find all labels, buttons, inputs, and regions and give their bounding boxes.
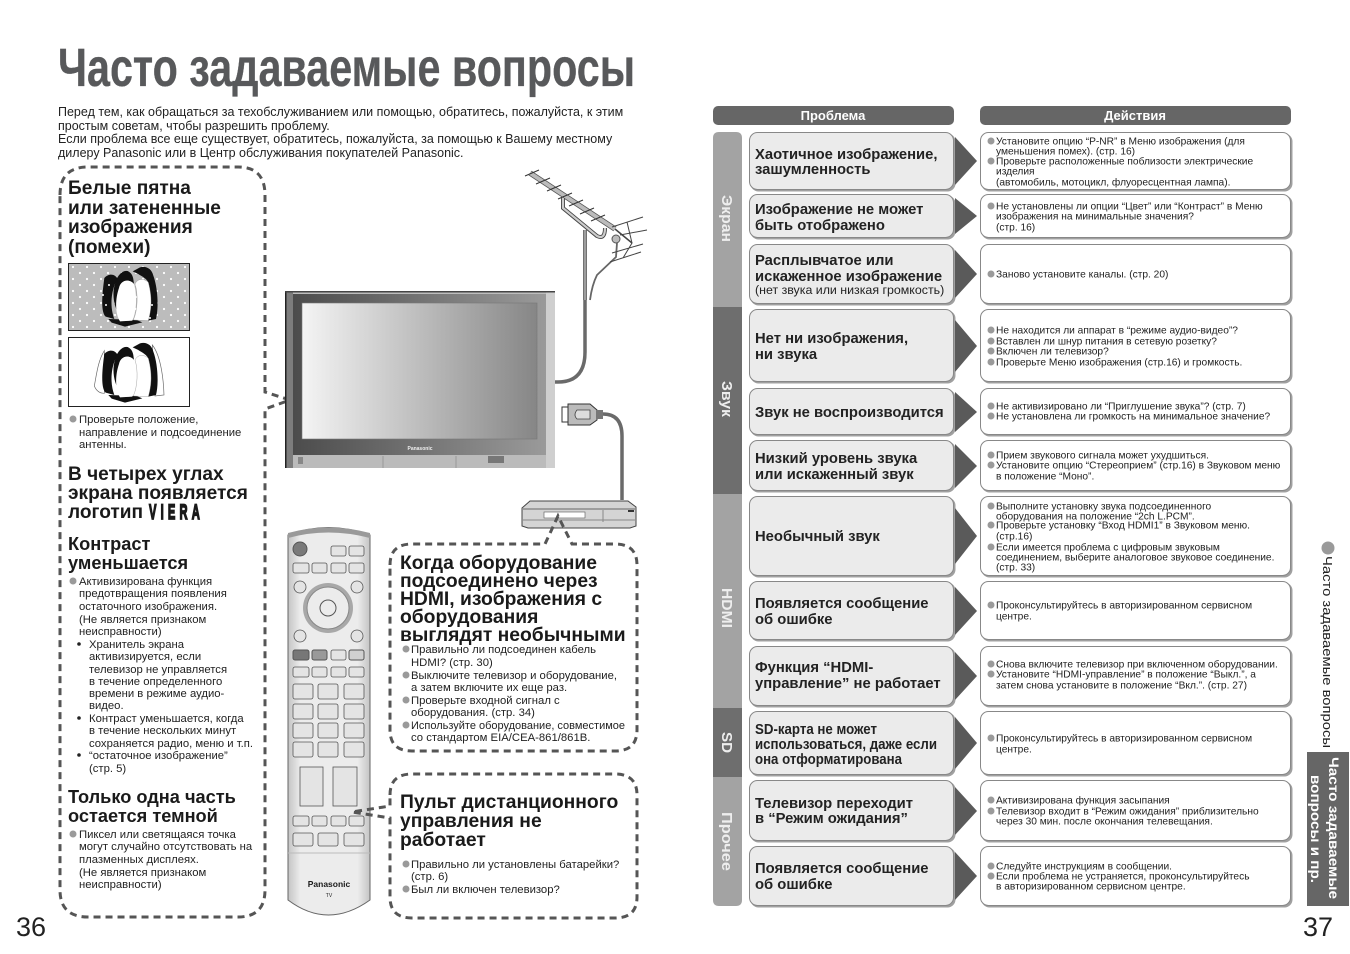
row 10: использоваться, даже если [755, 737, 937, 753]
row 5: Звук не воспроизводится [755, 405, 944, 421]
tip: contrast [70, 576, 253, 775]
tips: HDMI: Выключите телевизор и оборудование, [411, 670, 617, 682]
heading: corners logo: экрана появляется [68, 483, 248, 504]
title: Часто задаваемые вопросы [58, 38, 635, 98]
row 4 [750, 310, 1292, 384]
heading: white spots: (помехи) [68, 237, 151, 258]
row 6: или искаженный звук [755, 467, 914, 483]
page number 37: 37 [1303, 912, 1333, 942]
tip: dark part: неисправности) [79, 879, 162, 891]
illustration: remote control: TV [326, 893, 333, 899]
tip: contrast: телевизор не управляется [89, 664, 227, 676]
row 8: Появляется сообщение [755, 596, 929, 612]
row 12 [750, 846, 1292, 908]
heading: corners logo: логотип [68, 502, 143, 523]
tip: contrast: видео. [89, 700, 124, 712]
tab: screen [713, 132, 742, 307]
row 7: Проверьте установку “Вход HDMI1” в Звуковом меню. [996, 520, 1250, 532]
tip: contrast: (Не является признаком [79, 614, 206, 626]
row 2: Не установлены ли опции “Цвет” или “Контраст” в Меню [996, 202, 1263, 212]
tip: contrast: активизируется, если [89, 651, 201, 663]
image: clean penguins [68, 338, 190, 406]
illustration: remote control: Panasonic [308, 879, 351, 889]
tip: contrast: (стр. 5) [89, 763, 126, 775]
row 5 [750, 388, 1292, 436]
side tab [1307, 752, 1349, 906]
tip: antenna: Проверьте положение, [79, 414, 198, 426]
intro text: простым советам, чтобы разрешить проблему. [58, 119, 330, 133]
side tab: вопросы и пр. [1308, 775, 1324, 883]
tip: contrast: предотвращения появления [79, 588, 227, 600]
row 1: уменьшения помех). (стр. 16) [996, 146, 1135, 158]
row 11: в “Режим ожидания” [755, 811, 908, 827]
row 11: Активизирована функция засыпания [996, 794, 1170, 806]
tips: HDMI: а затем включите их еще раз. [411, 682, 567, 694]
tip: contrast: неисправности) [79, 626, 162, 638]
intro text: Если проблема все еще существует, обратитесь, пожалуйста, за помощью к Вашему местному [58, 132, 613, 146]
row 10 [750, 712, 1292, 776]
row 1 [750, 132, 1292, 192]
image: noisy penguins [68, 264, 190, 330]
row 3: Заново установите каналы. (стр. 20) [996, 270, 1168, 280]
category tabs [713, 132, 742, 906]
row 9: затем снова установите в положение “Вкл.”. (стр. 27) [996, 680, 1247, 692]
row 12: в авторизированном сервисном центре. [996, 882, 1186, 892]
intro text: дилеру Panasonic или в Центр обслуживания покупателей Panasonic. [58, 146, 464, 160]
panel: remote tips [352, 774, 637, 918]
heading: HDMI: оборудования [400, 607, 538, 628]
row 6: Установите опцию “Стереоприем” (стр.16) в Звуковом меню [996, 460, 1281, 472]
row 1: Установите опцию “P-NR” в Меню изображения (для [996, 136, 1245, 148]
heading: HDMI: выглядят необычными [400, 625, 626, 646]
tip: dark part: могут случайно отсутствовать на [79, 841, 253, 853]
illustration: HDMI plug and cable [562, 404, 622, 500]
row 1: изделия [996, 166, 1035, 178]
tip: contrast: в течение определенного [89, 676, 222, 688]
illustration: remote control [288, 528, 370, 915]
tip: dark part: (Не является признаком [79, 867, 206, 879]
row 4: Нет ни изображения, [755, 331, 908, 347]
row 6: в положение “Моно”. [996, 472, 1094, 482]
illustration: recorder [522, 501, 636, 528]
panel: HDMI tips [390, 516, 637, 751]
row 2: (стр. 16) [996, 222, 1035, 234]
row 2: изображения на минимальные значения? [996, 210, 1194, 222]
row 7: Необычный звук [755, 529, 880, 545]
row 11: Телевизор переходит [755, 796, 913, 812]
row 12: об ошибке [755, 877, 833, 893]
heading: HDMI: подсоединено через [400, 571, 598, 592]
row 1: зашумленность [755, 162, 870, 178]
row 9: Функция “HDMI- [755, 660, 873, 676]
row 7: (стр.16) [996, 532, 1032, 542]
heading: remote: управления не [400, 811, 542, 832]
heading: dark part [68, 787, 236, 826]
row 6: Низкий уровень звука [755, 451, 918, 467]
tips: HDMI [402, 644, 625, 744]
heading: contrast [68, 534, 188, 573]
tip: contrast: Хранитель экрана [89, 639, 185, 651]
intro text [58, 105, 623, 160]
heading: remote [400, 792, 618, 851]
tip: contrast: времени в режиме аудио- [89, 688, 225, 700]
row 7: Если имеется проблема с цифровым звуковым [996, 542, 1220, 554]
row 3: искаженное изображение [755, 269, 942, 285]
tip: dark part [70, 829, 253, 891]
row 1: (автомобиль, мотоцикл, флуоресцентная лампа). [996, 176, 1230, 188]
tip: antenna: антенны. [79, 439, 127, 451]
tip: antenna: направление и подсоединение [79, 427, 241, 439]
header: actions: Действия [1104, 108, 1166, 123]
tips: HDMI: оборудования. (стр. 34) [411, 707, 535, 719]
row 12: Появляется сообщение [755, 861, 929, 877]
heading: remote: работает [400, 830, 486, 851]
heading: dark part: Только одна часть [68, 787, 236, 807]
tips: HDMI: Правильно ли подсоединен кабель [411, 644, 596, 656]
heading: white spots [68, 178, 221, 258]
row 4: Вставлен ли шнур питания в сетевую розетку? [996, 336, 1217, 348]
page number 36: 36 [16, 912, 46, 942]
tips: HDMI: Проверьте входной сигнал с [411, 695, 560, 707]
row 8: центре. [996, 612, 1032, 622]
tip: contrast: сохраняется радио, меню и т.п. [89, 738, 253, 750]
row 1: Хаотичное изображение, [755, 147, 937, 163]
heading: contrast: Контраст [68, 534, 150, 554]
row 5: Не активизировано ли “Приглушение звука”? (стр. 7) [996, 402, 1246, 412]
heading: corners logo: VIERA [149, 499, 200, 524]
row 3 [750, 244, 1292, 306]
tab: SD: SD [718, 732, 735, 753]
tips: remote: (стр. 6) [411, 871, 448, 883]
header: problem: Проблема [801, 108, 866, 123]
tip: dark part: Пиксел или светящаяся точка [79, 829, 237, 841]
row 3: Расплывчатое или [755, 253, 893, 269]
tip: contrast: Контраст уменьшается, когда [89, 713, 244, 725]
row 10: она отформатирована [755, 752, 903, 768]
side tab: Часто задаваемые [1326, 757, 1342, 899]
tips: HDMI: со стандартом EIA/CEA-861/861B. [411, 732, 590, 744]
row 5: Не установлена ли громкость на минимальное значение? [996, 412, 1271, 422]
heading: HDMI [400, 553, 626, 646]
tip: contrast: “остаточное изображение” [89, 750, 228, 762]
row 4: ни звука [755, 347, 818, 363]
row 7: (стр. 33) [996, 562, 1035, 574]
row 7: Выполните установку звука подсоединенного [996, 502, 1212, 512]
tab: sound [713, 307, 742, 494]
row 9 [750, 646, 1292, 708]
row 2: быть отображено [755, 218, 885, 234]
row 12: Если проблема не устраняется, проконсультируйтесь [996, 870, 1250, 882]
tab: screen: Экран [718, 195, 735, 242]
tip: antenna [70, 414, 241, 451]
row 9: управление” не работает [755, 676, 941, 692]
tip: dark part: плазменных дисплеях. [79, 854, 199, 866]
heading: dark part: остается темной [68, 806, 218, 826]
row 2 [750, 194, 1292, 240]
row 9: Снова включите телевизор при включенном оборудовании. [996, 658, 1278, 670]
row 1: Проверьте расположенные поблизости электрические [996, 156, 1253, 168]
row 11: Телевизор входит в “Режим ожидания” приблизительно [996, 806, 1259, 818]
heading: HDMI: Когда оборудование [400, 553, 597, 574]
row 4: Не находится ли аппарат в “режиме аудио-видео”? [996, 326, 1238, 336]
row 8: об ошибке [755, 612, 833, 628]
heading: white spots: изображения [68, 217, 193, 238]
row 10: Проконсультируйтесь в авторизированном сервисном [996, 734, 1252, 744]
heading: remote: Пульт дистанционного [400, 792, 618, 813]
row 3: (нет звука или низкая громкость) [755, 283, 944, 297]
row 8: Проконсультируйтесь в авторизированном сервисном [996, 600, 1252, 612]
row 12: Следуйте инструкциям в сообщении. [996, 860, 1172, 872]
panel: left dashed tips [60, 167, 290, 917]
tab: HDMI [713, 494, 742, 708]
row 11 [750, 780, 1292, 842]
tips: HDMI: HDMI? (стр. 30) [411, 657, 493, 669]
row 4: Проверьте Меню изображения (стр.16) и громкость. [996, 356, 1242, 368]
tips: remote [402, 859, 619, 896]
row 2: Изображение не может [755, 202, 923, 218]
illustration: TV: Panasonic [407, 446, 433, 452]
tips: remote: Был ли включен телевизор? [411, 884, 560, 896]
heading: corners logo: В четырех углах [68, 464, 224, 485]
header: problem [713, 106, 954, 125]
illustration: antenna and cable [525, 170, 647, 382]
row 4: Включен ли телевизор? [996, 346, 1109, 358]
row 7: оборудования на положение “2ch L.PCM”. [996, 510, 1195, 522]
row 9: Установите “HDMI-управление” в положение “Выкл.”, а [996, 670, 1256, 680]
row 6 [750, 440, 1292, 492]
side index label: Часто задаваемые вопросы [1320, 556, 1335, 748]
row 11: через 30 мин. после окончания телевещания. [996, 816, 1213, 828]
tips: remote: Правильно ли установлены батарейки? [411, 859, 619, 871]
tab: SD [713, 708, 742, 777]
row 7 [750, 496, 1292, 578]
tab: other: Прочее [718, 812, 735, 871]
intro text: Перед тем, как обращаться за техобслуживанием или помощью, обратитесь, пожалуйста, к этим [58, 105, 623, 119]
tip: contrast: Активизирована функция [79, 576, 212, 588]
tab: sound: Звук [718, 381, 735, 418]
tab: other [713, 777, 742, 906]
illustration: TV [285, 291, 555, 468]
header: actions [980, 106, 1291, 125]
tab: HDMI: HDMI [718, 588, 735, 628]
row 8 [750, 582, 1292, 642]
row 6: Прием звукового сигнала может ухудшиться. [996, 450, 1209, 462]
tip: contrast: в течение нескольких минут [89, 725, 236, 737]
row 10: центре. [996, 744, 1032, 756]
tip: contrast: остаточного изображения. [79, 601, 217, 613]
heading: corners logo [68, 464, 248, 524]
heading: contrast: уменьшается [68, 553, 188, 573]
heading: white spots: Белые пятна [68, 178, 191, 199]
heading: white spots: или затененные [68, 198, 221, 219]
row 10: SD-карта не может [755, 722, 877, 738]
heading: HDMI: HDMI, изображения с [400, 589, 602, 610]
tips: HDMI: Используйте оборудование, совместимое [411, 720, 625, 732]
row 7: соединением, выберите аналоговое звуковое соединение. [996, 552, 1274, 564]
